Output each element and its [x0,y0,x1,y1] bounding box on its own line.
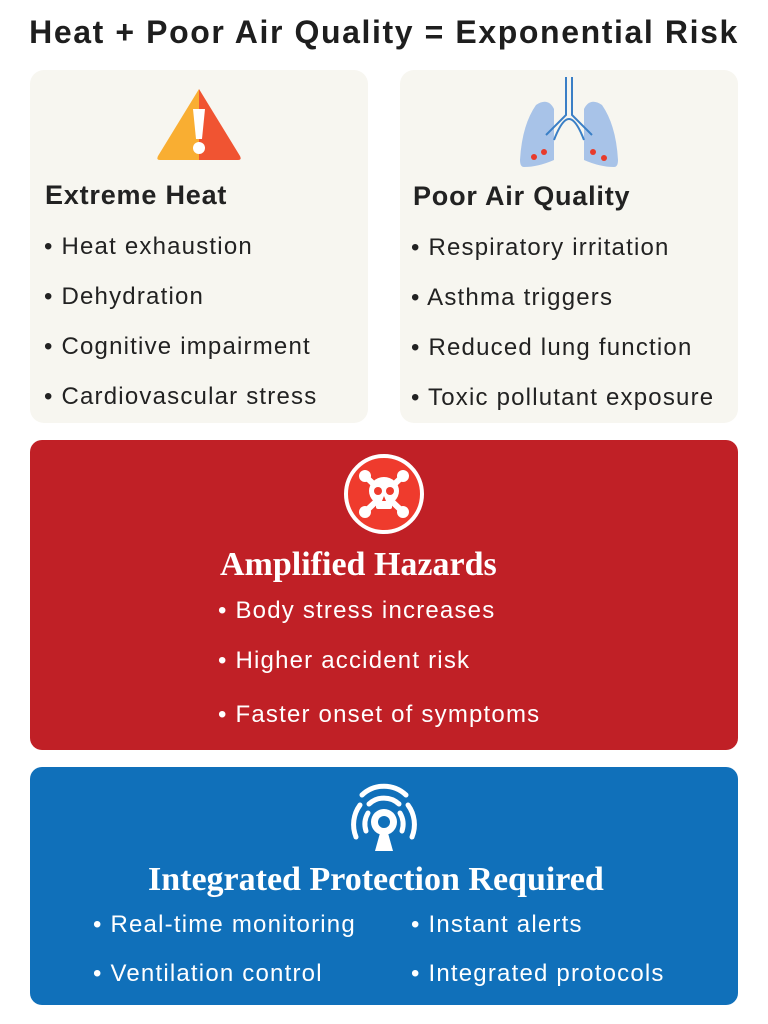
list: • Dehydration [44,283,204,310]
list [218,597,540,728]
list right: • Instant alerts [411,911,583,938]
list: • Faster onset of symptoms [218,701,540,728]
list: • Higher accident risk [218,647,470,674]
list: • Cognitive impairment [44,333,311,360]
list [411,234,714,411]
list: • Respiratory irritation [411,234,670,261]
list: • Asthma triggers [411,284,613,311]
list right [411,911,665,987]
list left: • Ventilation control [93,960,323,987]
panel: integrated protection [30,767,738,1005]
list: • Cardiovascular stress [44,383,317,410]
icon: skull [344,454,424,534]
list left [93,911,356,987]
list right: • Integrated protocols [411,960,665,987]
icon: lungs [520,77,618,167]
list: • Reduced lung function [411,334,693,361]
list: • Heat exhaustion [44,233,253,260]
icon: signal antenna [351,784,417,851]
title: Heat + Poor Air Quality = Exponential Risk [29,14,739,50]
panel: poor air quality [400,70,738,423]
list: • Body stress increases [218,597,495,624]
icon: warning triangle [157,89,241,160]
list: • Toxic pollutant exposure [411,384,714,411]
panel: extreme heat [30,70,368,423]
heading: Poor Air Quality [413,181,630,211]
heading: Extreme Heat [45,180,227,210]
panel: amplified hazards [30,440,738,750]
heading: Integrated Protection Required [148,861,604,898]
list [44,233,317,410]
list left: • Real-time monitoring [93,911,356,938]
heading: Amplified Hazards [220,546,497,583]
